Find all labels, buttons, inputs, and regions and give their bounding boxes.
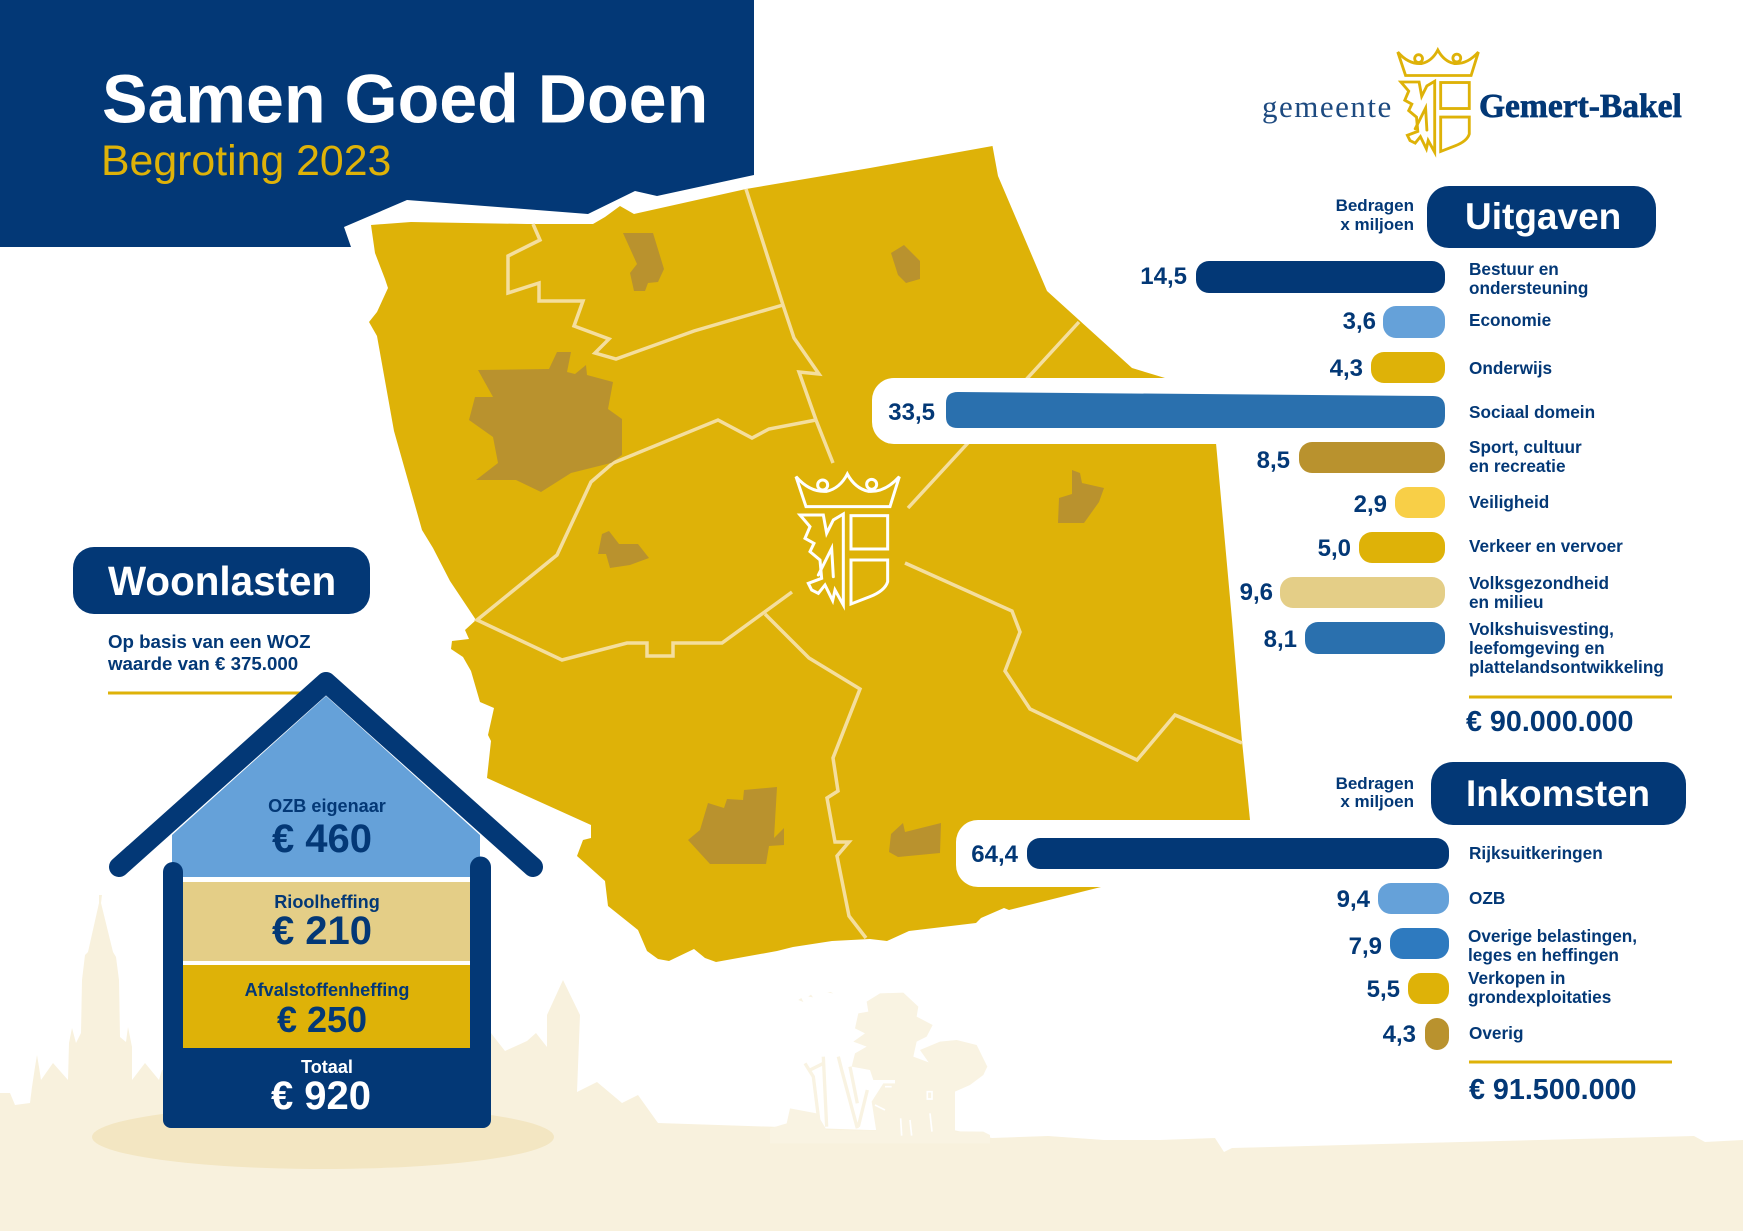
heading pill: Woonlasten — [73, 547, 370, 614]
bar: Sociaal domein: 33,5 — [888, 399, 935, 426]
bar: Economie: 3,6 — [1343, 308, 1376, 335]
bar: Onderwijs — [1330, 352, 1552, 383]
bar: Overige belastingen: leges en heffingen — [1468, 945, 1619, 965]
subtitle: Begroting 2023 — [101, 137, 391, 185]
house section: OZB eigenaar: € 460 — [272, 817, 372, 861]
shadow ellipse under house — [92, 1105, 554, 1169]
bar: Volkshuisvesting — [1264, 619, 1664, 677]
bar: Volkshuisvesting: Volkshuisvesting, — [1469, 619, 1614, 639]
bar: Overig: Overig — [1469, 1023, 1523, 1043]
bar: Bestuur en ondersteuning: ondersteuning — [1469, 278, 1588, 298]
bar: Sport, cultuur en recreatie: 8,5 — [1257, 447, 1290, 474]
bar: Bestuur en ondersteuning: 14,5 — [1140, 263, 1187, 290]
map towns — [469, 233, 1104, 864]
bar: Veiligheid — [1354, 487, 1549, 518]
note: amounts in millions: x miljoen — [1340, 792, 1414, 811]
house roof — [119, 682, 533, 867]
icon: logo crest — [1398, 50, 1478, 152]
bar: Sociaal domein: Sociaal domein — [1469, 402, 1595, 422]
house section: Rioolheffing — [183, 882, 470, 961]
bar: Sport, cultuur en recreatie — [1257, 437, 1582, 476]
bar: Sport, cultuur en recreatie: Sport, cultuur — [1469, 437, 1582, 457]
bar: Economie: Economie — [1469, 310, 1551, 330]
bar: Verkeer en vervoer: Verkeer en vervoer — [1469, 536, 1623, 556]
bar: Rijksuitkeringen: Rijksuitkeringen — [1469, 843, 1603, 863]
title: Samen Goed Doen — [102, 62, 708, 138]
bar: Veiligheid: 2,9 — [1354, 491, 1387, 518]
house section: Afvalstoffenheffing: € 250 — [277, 999, 367, 1040]
logo: gemeente Gemert-Bakel — [1262, 50, 1682, 152]
house section: Afvalstoffenheffing: Afvalstoffenheffing — [245, 980, 409, 1000]
panel: inkomsten — [971, 762, 1686, 1106]
house section: Rioolheffing: Rioolheffing — [274, 892, 380, 912]
heading pill: Uitgaven — [1427, 186, 1656, 248]
bar: Volksgezondheid en milieu: Volksgezondheid — [1469, 573, 1609, 593]
text: WOZ basis — [107, 631, 310, 674]
heading pill: Inkomsten — [1431, 762, 1686, 825]
bar: Overige belastingen: Overige belastingen, — [1468, 926, 1637, 946]
house section: Afvalstoffenheffing — [183, 965, 470, 1048]
bar: OZB: OZB — [1469, 888, 1505, 908]
bar: Verkeer en vervoer — [1318, 532, 1623, 563]
bar: Overige belastingen: 7,9 — [1349, 933, 1382, 960]
bar: Verkopen in grondexploitaties: Verkopen in — [1468, 968, 1565, 988]
panel: uitgaven — [888, 186, 1672, 738]
note: amounts in millions: Bedragen — [1336, 774, 1414, 793]
house total: € 920 — [271, 1074, 371, 1118]
bar: OZB: 9,4 — [1337, 886, 1371, 913]
house section: OZB eigenaar — [172, 696, 480, 877]
text: WOZ basis: waarde van € 375.000 — [107, 653, 298, 674]
note: amounts in millions — [1336, 196, 1414, 234]
bar: Verkopen in grondexploitaties — [1367, 968, 1611, 1007]
bar: Verkopen in grondexploitaties: 5,5 — [1367, 976, 1400, 1003]
landscape silhouette background — [0, 895, 1743, 1231]
bar: Overig: 4,3 — [1383, 1021, 1416, 1048]
map of the municipality — [369, 146, 1250, 962]
bar: OZB — [1337, 883, 1505, 914]
house section: OZB eigenaar: OZB eigenaar — [268, 796, 386, 816]
bar: Verkopen in grondexploitaties: grondexploitaties — [1468, 987, 1611, 1007]
bar: Volksgezondheid en milieu — [1240, 573, 1609, 612]
bar: Bestuur en ondersteuning: Bestuur en — [1469, 259, 1559, 279]
bar: Volkshuisvesting: leefomgeving en — [1469, 638, 1605, 658]
total uitgaven: € 90.000.000 — [1466, 706, 1634, 738]
house diagram — [119, 682, 533, 1128]
callout backgrounds behind long bars — [872, 378, 1316, 887]
house section: Rioolheffing: € 210 — [272, 909, 372, 953]
note: amounts in millions: x miljoen — [1340, 215, 1414, 234]
map outline — [369, 146, 1250, 962]
text: WOZ basis: Op basis van een WOZ — [108, 631, 310, 652]
bar: Bestuur en ondersteuning — [1140, 259, 1588, 298]
heading pill: Woonlasten: Woonlasten — [108, 558, 336, 604]
total inkomsten: € 91.500.000 — [1469, 1074, 1637, 1106]
bar: Sociaal domein — [888, 392, 1595, 428]
bar: Onderwijs: 4,3 — [1330, 355, 1363, 382]
note: amounts in millions: Bedragen — [1336, 196, 1414, 215]
bar: Rijksuitkeringen — [971, 838, 1603, 869]
bar: Volksgezondheid en milieu: en milieu — [1469, 592, 1544, 612]
title banner — [0, 0, 754, 247]
bar: Verkeer en vervoer: 5,0 — [1318, 535, 1351, 562]
map district lines — [477, 189, 1242, 938]
bar: Volkshuisvesting: 8,1 — [1264, 626, 1297, 653]
note: amounts in millions — [1336, 774, 1414, 811]
logo word Gemert-Bakel: Gemert-Bakel — [1479, 88, 1682, 125]
bar: Onderwijs: Onderwijs — [1469, 358, 1552, 378]
bar: Overig — [1383, 1018, 1523, 1050]
logo word gemeente: gemeente — [1262, 89, 1393, 124]
bar: Veiligheid: Veiligheid — [1469, 492, 1549, 512]
house total: Totaal — [301, 1057, 353, 1077]
panel: woonlasten — [73, 547, 554, 1169]
heading pill: Inkomsten: Inkomsten — [1466, 773, 1650, 814]
bar: Sport, cultuur en recreatie: en recreatie — [1469, 456, 1566, 476]
heading pill: Uitgaven: Uitgaven — [1465, 196, 1621, 237]
bar: Economie — [1343, 306, 1551, 338]
bar: Volkshuisvesting: plattelandsontwikkeling — [1469, 657, 1664, 677]
icon: municipal crest on map — [796, 474, 899, 605]
house frame — [163, 856, 491, 1128]
bar: Overige belastingen — [1349, 926, 1637, 965]
bar: Volksgezondheid en milieu: 9,6 — [1240, 579, 1273, 606]
bar: Rijksuitkeringen: 64,4 — [971, 841, 1019, 868]
